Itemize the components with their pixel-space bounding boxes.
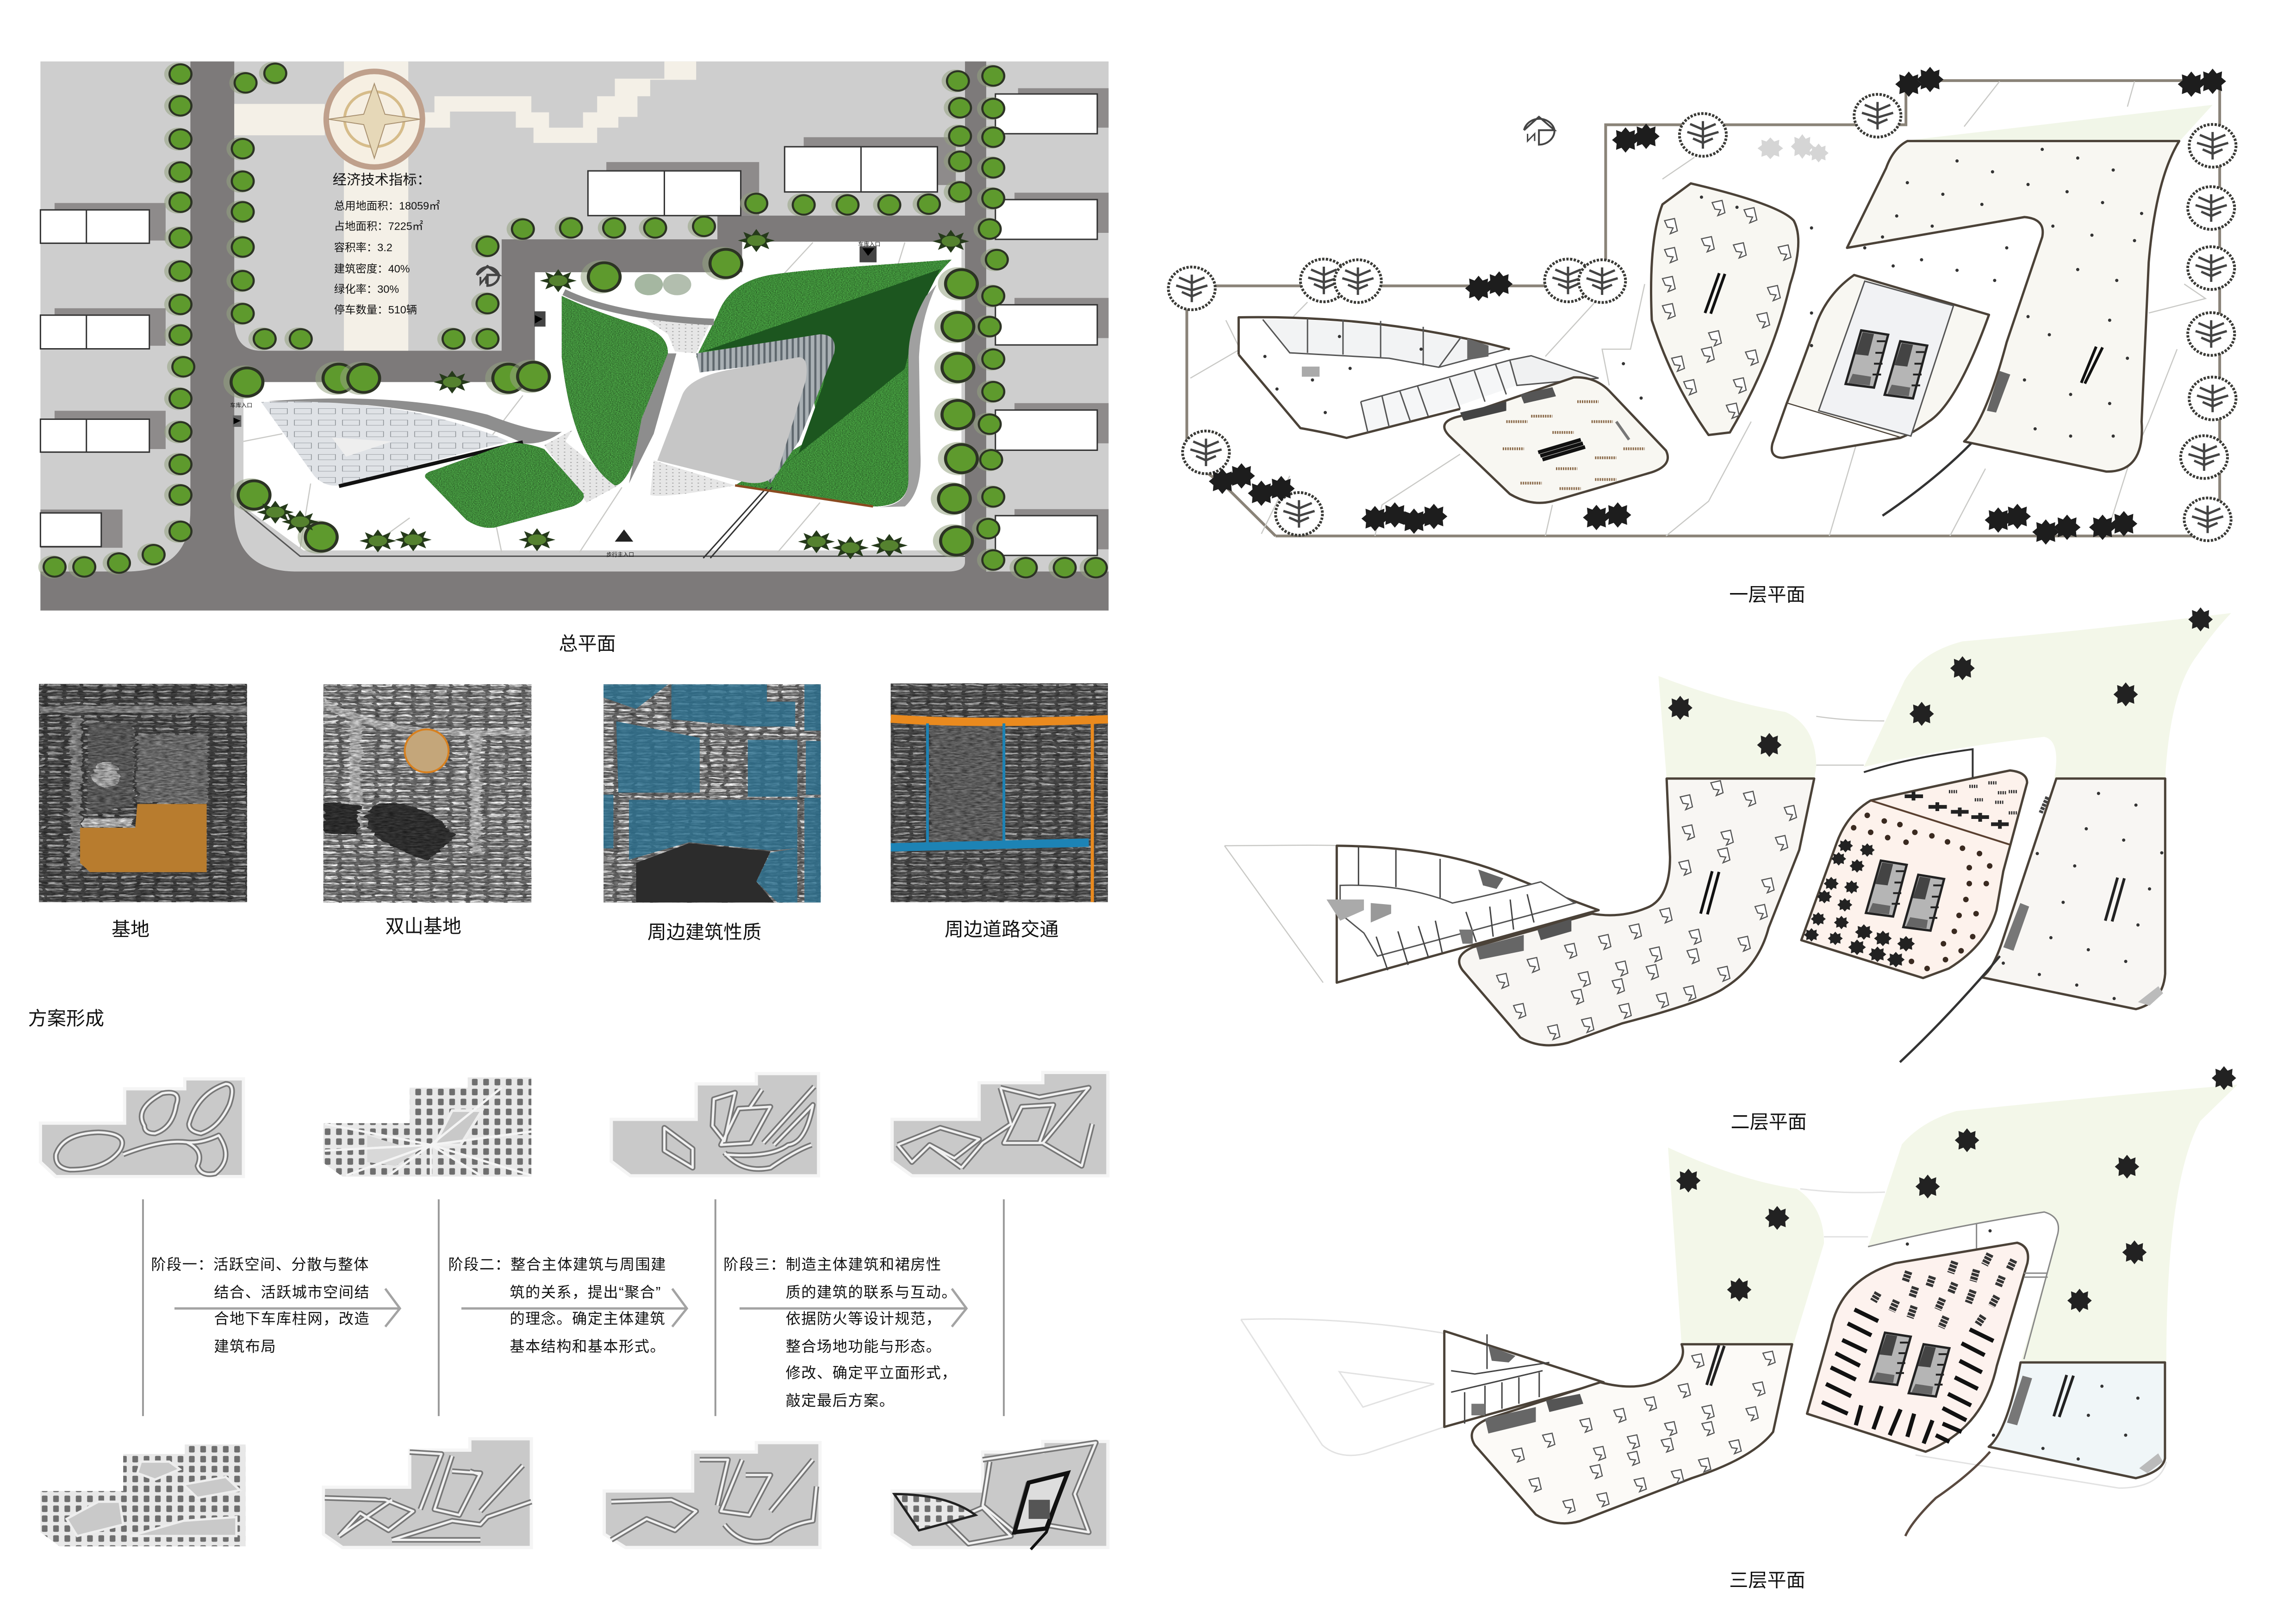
economic indicators text: 停车数量：510辆 xyxy=(334,304,417,316)
diagram 5: grid with voids xyxy=(40,1444,246,1546)
economic indicators text xyxy=(333,172,440,316)
entrance labels: 车库入口 xyxy=(858,240,880,247)
green roofs xyxy=(1658,613,2231,779)
panel: third floor plan xyxy=(1241,1066,2238,1591)
economic indicators text: 占地面积：7225㎡ xyxy=(334,220,423,232)
map captions: 基地 xyxy=(112,918,149,940)
text: stage three: 整合场地功能与形态。 xyxy=(786,1338,941,1355)
speckled paving xyxy=(544,317,735,503)
east block xyxy=(1868,1212,2165,1536)
site plan drawing xyxy=(38,62,1108,611)
tower library floor xyxy=(1807,1243,2028,1452)
text: stage three: 敲定最后方案。 xyxy=(786,1393,895,1409)
economic indicators text: 建筑密度：40% xyxy=(334,262,410,275)
economic indicators text: 经济技术指标： xyxy=(333,172,431,188)
diagram 6: refined massing xyxy=(324,1439,531,1548)
central teardrop block xyxy=(1651,183,1798,435)
tower restaurant floor xyxy=(1801,749,2027,978)
panel: master site plan xyxy=(38,62,1108,654)
map: surrounding road traffic xyxy=(891,683,1108,902)
terrace trees xyxy=(1668,607,2213,757)
paved plaza path xyxy=(234,62,696,351)
icon: north arrow xyxy=(477,266,499,286)
green roofs xyxy=(1668,1085,2238,1362)
west wing xyxy=(1444,1331,1604,1427)
map: base site xyxy=(39,684,247,902)
caption: 一层平面: 一层平面 xyxy=(1729,584,1805,605)
economic indicators text: 总用地面积：18059㎡ xyxy=(334,200,440,212)
text: stage one xyxy=(151,1256,370,1355)
panel: scheme development diagrams xyxy=(40,1072,1108,1549)
icon: north arrow xyxy=(1524,117,1555,144)
text: stage two: 阶段二：整合主体建筑与周围建 xyxy=(448,1256,666,1273)
text: stage two: 的理念。确定主体建筑 xyxy=(510,1311,666,1327)
map captions: 周边建筑性质 xyxy=(647,922,761,943)
text: stage three: 修改、确定平立面形式， xyxy=(786,1365,957,1381)
entrance labels xyxy=(230,240,880,558)
caption: 三层平面: 三层平面 xyxy=(1729,1569,1805,1591)
diagram 4: faceted lines xyxy=(892,1072,1108,1176)
trees xyxy=(38,62,1108,579)
text: stage three: 依据防火等设计规范， xyxy=(786,1311,941,1327)
map drawings xyxy=(39,683,1108,903)
entrance markers xyxy=(233,246,877,542)
west building roof xyxy=(261,399,562,486)
diagram 3: massing xyxy=(611,1074,819,1176)
east block xyxy=(1900,779,2165,1062)
green terrace xyxy=(1911,105,2213,140)
north-east L block xyxy=(1847,141,2179,472)
south-west retail block xyxy=(1444,356,1668,503)
diagram 8: final plan xyxy=(892,1442,1108,1549)
west wing xyxy=(1238,317,1517,438)
caption: 二层平面: 二层平面 xyxy=(1730,1111,1807,1132)
second floor drawing xyxy=(1225,607,2231,1062)
tower block xyxy=(1772,275,1989,516)
entrance labels: 车库入口 xyxy=(230,401,252,408)
stage dividers and arrows xyxy=(143,1199,1004,1416)
terrace trees xyxy=(1676,1066,2236,1312)
text: stage one: 结合、活跃城市空间结 xyxy=(214,1284,370,1301)
map captions xyxy=(112,916,1059,943)
caption: 总平面: 总平面 xyxy=(559,633,616,654)
diagram 7: refined lines xyxy=(604,1443,820,1548)
diagram drawings xyxy=(40,1072,1108,1549)
map captions: 双山基地 xyxy=(385,916,461,937)
text: stage two: 基本结构和基本形式。 xyxy=(510,1338,666,1355)
diagram 2: column grid xyxy=(324,1077,531,1177)
map captions: 周边道路交通 xyxy=(945,918,1059,940)
text: stage one: 建筑布局 xyxy=(214,1338,276,1355)
text: stage three: 质的建筑的联系与互动。 xyxy=(786,1284,957,1301)
text: stage one: 合地下车库柱网，改造 xyxy=(214,1311,370,1327)
black shrubs xyxy=(1209,67,2226,545)
heading: 方案形成: 方案形成 xyxy=(28,1008,104,1029)
diagram 1: organic loops xyxy=(40,1079,243,1177)
main curved block xyxy=(1459,779,1814,1045)
text: stage two xyxy=(448,1256,666,1355)
entrance labels: 步行主入口 xyxy=(606,551,634,558)
grey tower roof xyxy=(657,334,873,558)
text: stage three: 阶段三：制造主体建筑和裙房性 xyxy=(723,1256,942,1273)
text: stage two: 筑的关系，提出“聚合” xyxy=(510,1284,661,1301)
panel: site analysis maps xyxy=(39,683,1108,943)
outline trees xyxy=(1169,94,2236,541)
surrounding buildings xyxy=(40,88,1108,550)
panel: first floor plan xyxy=(1169,67,2236,605)
text: stage three xyxy=(723,1256,957,1409)
panel: second floor plan xyxy=(1225,607,2231,1132)
main curved block xyxy=(1472,1344,1792,1524)
first floor drawing xyxy=(1169,67,2236,545)
economic indicators text: 绿化率：30% xyxy=(334,283,399,295)
green roofs xyxy=(425,260,952,528)
text: stage one: 阶段一：活跃空间、分散与整体 xyxy=(151,1256,369,1273)
icon: compass plaza xyxy=(326,71,423,167)
map: surrounding building use xyxy=(604,684,821,903)
economic indicators text: 容积率：3.2 xyxy=(334,241,392,253)
west wing xyxy=(1326,846,1599,983)
map: Shuangshan site xyxy=(324,684,531,903)
third floor drawing xyxy=(1241,1066,2238,1536)
